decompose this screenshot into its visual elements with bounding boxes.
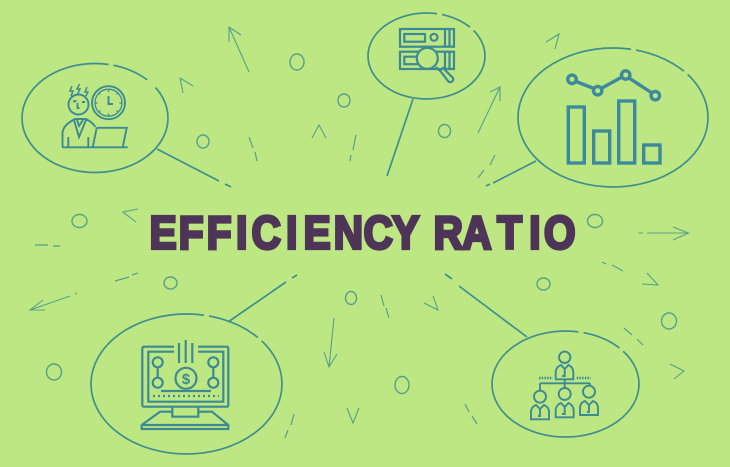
- icon: server racks with magnifier: [400, 29, 454, 82]
- panel: org chart: [445, 274, 639, 437]
- connector line: computer: [228, 275, 297, 322]
- connector line: chart: [486, 161, 536, 186]
- ellipse outline: worker: [22, 62, 168, 172]
- panel: bar and line chart: [486, 46, 708, 187]
- decorative dashes: [35, 135, 643, 438]
- ellipse outline: org chart: [492, 329, 639, 437]
- ellipse outline: server: [368, 10, 485, 99]
- connector line: org chart: [445, 274, 527, 337]
- dollar sign: $: [182, 371, 191, 388]
- panel: computer with money: [91, 275, 297, 454]
- line chart icon: [568, 71, 660, 100]
- panel: stressed worker: [22, 62, 231, 187]
- decorative chevrons: [123, 34, 684, 423]
- icon: worker with clock and laptop: [62, 84, 128, 147]
- icon: organisation hierarchy: [531, 352, 598, 419]
- ellipse outline: computer: [91, 312, 282, 454]
- connector line: worker: [157, 149, 231, 187]
- title: EFFICIENCY RATIO: [150, 208, 576, 259]
- decorative circles: [46, 54, 676, 394]
- connector line: server: [387, 99, 413, 176]
- panel: server search: [368, 10, 485, 176]
- ellipse outline: chart: [518, 46, 708, 187]
- icon: monitor with dollar coin: [142, 340, 228, 429]
- bar chart icon: [568, 101, 660, 163]
- decorative arrows: [30, 27, 688, 367]
